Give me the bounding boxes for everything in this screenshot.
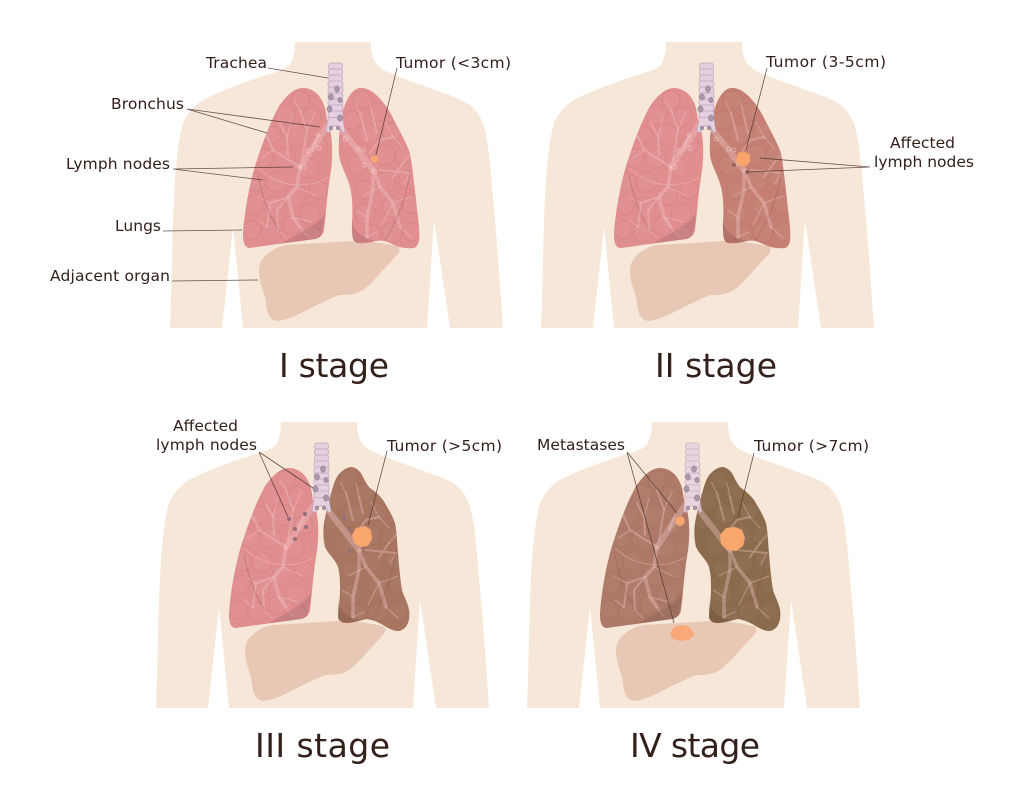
metastasis: lung [675, 516, 685, 526]
heading: II stage: II stage [655, 346, 777, 385]
right lung IV [694, 467, 780, 631]
label: lungs: Lungs [115, 217, 161, 235]
tumor I [371, 155, 378, 163]
heading: I stage: I stage [279, 346, 389, 385]
tumor IV [720, 527, 745, 551]
label: affected lymph nodes: Affected [173, 417, 238, 435]
leader lines I [163, 68, 397, 281]
left lung II [614, 88, 704, 248]
panel: stage I [50, 42, 511, 385]
body silhouette II [541, 42, 874, 328]
adjacent organ III [245, 621, 385, 701]
label: lymph nodes: Lymph nodes [66, 155, 170, 173]
body silhouette IV [527, 422, 860, 708]
affected nodes II [732, 163, 749, 174]
tumor II [736, 152, 750, 166]
metastasis: liver [670, 625, 694, 641]
panel: stage IV [527, 422, 869, 765]
leader lines II [746, 68, 870, 172]
right lung I [338, 88, 420, 248]
adjacent organ IV [616, 621, 756, 701]
label: tumor: Tumor (>5cm) [386, 437, 502, 455]
label: tumor: Tumor (>7cm) [753, 437, 869, 455]
label: affected lymph nodes: lymph nodes [156, 436, 257, 454]
heading: IV stage: IV stage [630, 726, 760, 765]
right lung II [710, 88, 790, 248]
trachea II [697, 63, 716, 133]
label: metastases: Metastases [537, 436, 625, 454]
tumor III [352, 526, 372, 547]
label: tumor: Tumor (<3cm) [395, 54, 511, 72]
panel: stage III [156, 417, 502, 765]
trachea I [326, 63, 345, 133]
left lung I [243, 88, 332, 248]
right lung III [323, 467, 410, 631]
heading: III stage: III stage [255, 726, 390, 765]
leader lines III [259, 451, 387, 525]
label: adjacent organ: Adjacent organ [50, 267, 170, 285]
affected nodes III [287, 512, 352, 553]
body silhouette III [156, 422, 489, 708]
label: tumor: Tumor (3-5cm) [765, 53, 886, 71]
left lung III [229, 468, 318, 628]
label: affected lymph nodes: Affected [890, 134, 955, 152]
left lung IV [600, 468, 690, 628]
adjacent organ II [630, 241, 770, 321]
adjacent organ I [259, 241, 399, 321]
leader lines IV [627, 452, 754, 623]
trachea IV [683, 443, 702, 513]
body silhouette I [170, 42, 503, 328]
label: affected lymph nodes: lymph nodes [874, 153, 974, 171]
panel: stage II [541, 42, 974, 385]
label: trachea: Trachea [205, 54, 267, 72]
trachea III [312, 443, 331, 513]
label: bronchus: Bronchus [111, 95, 184, 113]
